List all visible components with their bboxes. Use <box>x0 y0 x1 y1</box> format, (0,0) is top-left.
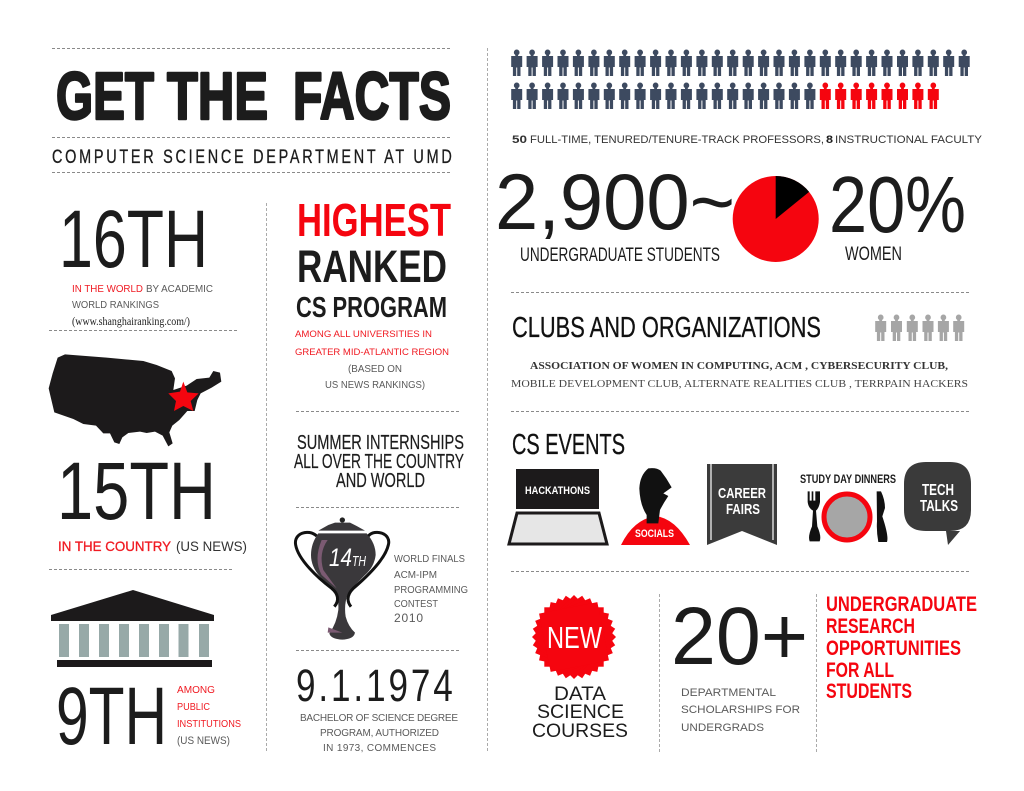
text: world finals: PROGRAMMING <box>394 585 468 596</box>
text: summer internships <box>294 432 464 492</box>
note: among all universities: AMONG ALL UNIVERSITIES IN <box>295 329 432 340</box>
callout: undergraduate research: OPPORTUNITIES <box>826 637 961 660</box>
stat: undergraduate students: UNDERGRADUATE STUDENTS <box>520 245 720 266</box>
icon: tech talks speech bubble: TECH <box>922 482 954 499</box>
text: club list: MOBILE DEVELOPMENT CLUB, ALTERNATE REALITIES CLUB , TERRPAIN HACKERS <box>511 378 968 390</box>
icon: socials person <box>621 468 690 545</box>
chart: faculty pictogram <box>511 50 970 109</box>
stat: 15th in the country: (US NEWS) <box>176 538 247 554</box>
icon: trophy 14th: 14 <box>329 544 352 572</box>
stat: 16th in the world: (www.shanghairanking.com/) <box>72 316 190 328</box>
title: GET <box>56 59 154 134</box>
stat: 16th in the world: BY ACADEMIC <box>146 284 213 295</box>
stat: 16th in the world <box>59 194 213 328</box>
stat: date: 9.1.1974 <box>296 660 453 711</box>
icon: institution building <box>51 590 214 667</box>
caption: faculty counts: 50 <box>512 134 527 146</box>
icon: career fairs banner: FAIRS <box>726 501 760 518</box>
text: world finals: ACM-IPM <box>394 570 437 581</box>
icon: six people <box>875 315 964 341</box>
stat: 15th in the country: IN THE COUNTRY <box>58 538 172 554</box>
callout: undergraduate research: RESEARCH <box>826 615 915 638</box>
text: data science courses: SCIENCE <box>537 702 624 723</box>
chart: pie women share <box>733 176 819 262</box>
stat: 16th in the world: IN THE WORLD <box>72 284 143 295</box>
stat: 20 percent women: WOMEN <box>845 244 902 265</box>
icon: trophy 14th: TH <box>352 553 366 570</box>
text: bachelor of science <box>300 713 458 754</box>
stat: 9th among public institutions: (US NEWS) <box>177 735 230 747</box>
stat: 20+ scholarships <box>671 591 808 734</box>
caption: faculty counts: 8 <box>826 134 833 146</box>
icon: hackathons laptop: HACKATHONS <box>525 485 590 497</box>
icon: hackathons laptop <box>509 469 607 544</box>
icon: tech talks speech bubble <box>904 462 971 545</box>
note: among all universities: (BASED ON <box>348 363 402 375</box>
icon: US map with star <box>49 354 221 446</box>
text: data science courses: COURSES <box>532 721 628 742</box>
heading: highest ranked CS program: HIGHEST <box>297 194 451 246</box>
stat: 9th among public institutions: 9TH <box>56 671 167 762</box>
callout: undergraduate research: UNDERGRADUATE <box>826 593 977 616</box>
stat: 20 percent women: 20% <box>829 160 966 249</box>
title: FACTS <box>293 59 451 134</box>
text: world finals <box>394 554 468 625</box>
stat: 16th in the world: WORLD RANKINGS <box>72 300 159 311</box>
heading: highest ranked CS program: RANKED <box>297 241 447 292</box>
text: bachelor of science: PROGRAM, AUTHORIZED <box>320 728 439 739</box>
icon: tech talks speech bubble: TALKS <box>920 498 958 515</box>
title: THE <box>167 59 268 134</box>
stat: 16th in the world: 16TH <box>59 194 208 285</box>
subtitle: COMPUTER SCIENCE DEPARTMENT AT UMD <box>52 146 452 168</box>
note: among all universities: US NEWS RANKINGS) <box>325 379 425 391</box>
icon: career fairs banner <box>707 464 777 545</box>
text: summer internships: SUMMER INTERNSHIPS <box>297 432 464 454</box>
text: data science courses <box>532 684 628 742</box>
icon: career fairs banner: CAREER <box>718 485 766 502</box>
heading: highest ranked CS program: CS PROGRAM <box>296 292 447 324</box>
title <box>56 59 451 134</box>
text: club list <box>511 360 968 390</box>
icon: study day dinners plate <box>800 474 896 542</box>
stat: 20+ scholarships: SCHOLARSHIPS FOR <box>681 704 800 716</box>
text: bachelor of science: BACHELOR OF SCIENCE DEGREE <box>300 713 458 724</box>
text: data science courses: DATA <box>554 684 606 705</box>
heading: highest ranked CS program <box>296 194 451 324</box>
stat: 9th among public institutions: PUBLIC <box>177 702 210 713</box>
caption: faculty counts <box>512 134 983 146</box>
text: bachelor of science: IN 1973, COMMENCES <box>323 743 436 754</box>
text: summer internships: ALL OVER THE COUNTRY <box>294 451 464 473</box>
stat: 20+ scholarships: DEPARTMENTAL <box>681 687 776 699</box>
callout: undergraduate research <box>826 593 977 703</box>
icon: new starburst: NEW <box>547 620 603 655</box>
caption: faculty counts: INSTRUCTIONAL FACULTY <box>835 134 983 146</box>
text: club list: ASSOCIATION OF WOMEN IN COMPUTING, ACM , CYBERSECURITY CLUB, <box>530 360 948 372</box>
note: among all universities: GREATER MID-ATLANTIC REGION <box>295 347 449 358</box>
stat: 9th among public institutions: AMONG <box>177 685 215 696</box>
caption: faculty counts: FULL-TIME, TENURED/TENURE-TRACK PROFESSORS, <box>530 134 824 146</box>
text: world finals: 2010 <box>394 611 423 625</box>
callout: undergraduate research: FOR ALL <box>826 659 894 682</box>
stat: 9th among public institutions: INSTITUTIONS <box>177 719 241 730</box>
stat: undergraduate students: 2,900~ <box>495 157 735 246</box>
text: world finals: CONTEST <box>394 599 438 610</box>
callout: undergraduate research: STUDENTS <box>826 680 912 703</box>
note: among all universities <box>295 329 449 391</box>
heading: CS events: CS EVENTS <box>512 429 625 461</box>
stat: 15th in the country: 15TH <box>57 446 216 537</box>
icon: new starburst <box>532 595 616 679</box>
stat: 20+ scholarships: UNDERGRADS <box>681 722 764 734</box>
heading: clubs and organizations: CLUBS AND ORGANIZATIONS <box>512 312 821 344</box>
text: world finals: WORLD FINALS <box>394 554 465 565</box>
stat: 20+ scholarships: 20+ <box>671 591 808 682</box>
icon: trophy 14th <box>295 517 389 640</box>
icon: study day dinners plate: STUDY DAY DINNERS <box>800 474 896 486</box>
icon: socials person: SOCIALS <box>635 528 674 540</box>
text: summer internships: AND WORLD <box>336 470 425 492</box>
